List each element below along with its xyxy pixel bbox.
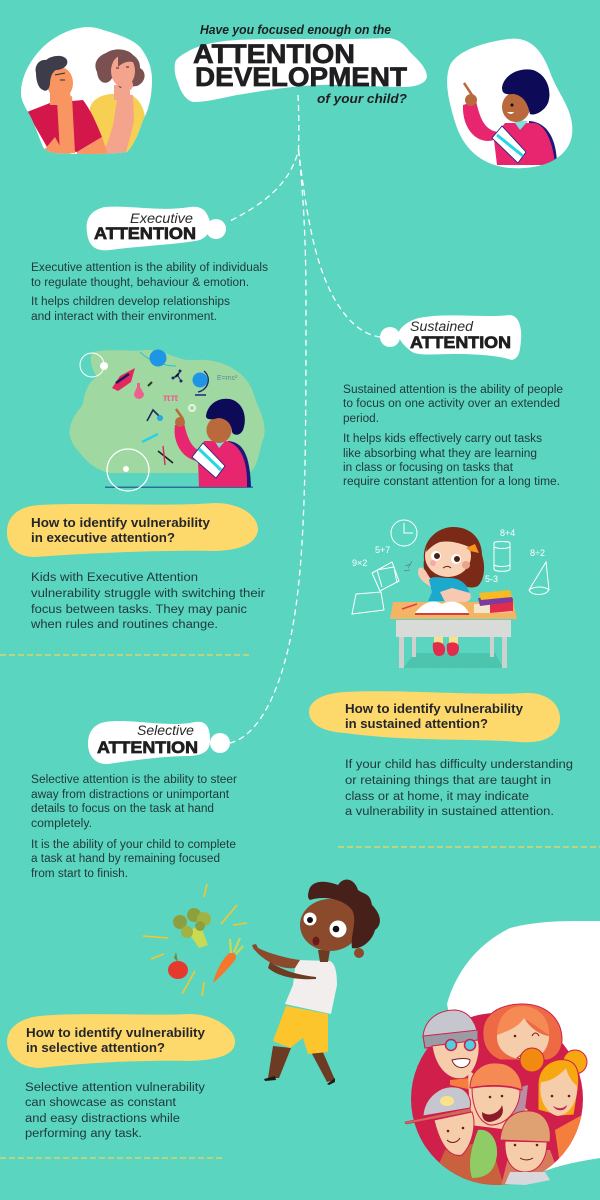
illustration: student and science icons <box>69 350 265 491</box>
title: ATTENTION <box>193 39 355 69</box>
callout: how to identify executive vulnerability: in executive attention? <box>31 530 175 545</box>
text: executive vulnerability: vulnerability struggle with switching their <box>31 588 265 600</box>
text: sustained vulnerability: or retaining things that are taught in <box>345 775 551 787</box>
illustration: boy pointing <box>447 39 572 168</box>
text: executive description: and interact with their environment. <box>31 311 217 323</box>
text: selective vulnerability: and easy distractions while <box>25 1113 180 1125</box>
callout: how to identify executive vulnerability: How to identify vulnerability <box>31 515 211 530</box>
heading: sustained attention <box>380 315 521 360</box>
text: executive vulnerability <box>30 572 265 631</box>
heading: selective attention: ATTENTION <box>97 739 198 757</box>
text: selective description: Selective attention is the ability to steer <box>31 774 237 786</box>
text: executive description: Executive attention is the ability of individuals <box>31 262 268 274</box>
title: of your child? <box>317 92 407 106</box>
text: sustained vulnerability: a vulnerability in sustained attention. <box>345 806 554 818</box>
text: sustained description: It helps kids effectively carry out tasks <box>343 433 542 445</box>
text: selective vulnerability <box>25 1082 205 1140</box>
title <box>175 23 427 106</box>
text: selective vulnerability: Selective attention vulnerability <box>25 1082 205 1094</box>
illustration: thinking parents <box>21 27 152 160</box>
callout: how to identify sustained vulnerability <box>309 691 560 742</box>
heading: executive attention: ATTENTION <box>94 225 196 243</box>
text: sustained description: to focus on one activity over an extended <box>343 398 560 410</box>
callout: how to identify sustained vulnerability: How to identify vulnerability <box>345 701 524 716</box>
text: sustained description: Sustained attention is the ability of people <box>343 384 563 396</box>
text: selective vulnerability: performing any task. <box>25 1128 142 1140</box>
text: executive description: It helps children develop relationships <box>31 296 230 308</box>
text: executive vulnerability: focus between tasks. They may panic <box>31 604 247 616</box>
callout: how to identify executive vulnerability <box>7 503 258 557</box>
text: sustained description <box>343 384 563 488</box>
text: selective description: details to focus on the task at hand <box>31 803 214 815</box>
text: executive vulnerability: when rules and routines change. <box>30 619 218 631</box>
illustration: girl at desk: 8+4 <box>500 528 515 538</box>
callout: how to identify sustained vulnerability: in sustained attention? <box>345 716 488 731</box>
illustration: group of children <box>405 1004 587 1190</box>
text: selective description <box>31 774 237 880</box>
text: executive vulnerability: Kids with Executive Attention <box>31 572 198 584</box>
text: sustained vulnerability: If your child has difficulty understanding <box>345 759 573 771</box>
illustration: girl at desk: 8÷2 <box>530 548 545 558</box>
illustration: girl at desk: 5+7 <box>375 545 390 555</box>
decorative white blob behind kids <box>447 921 600 1175</box>
callout: how to identify selective vulnerability: How to identify vulnerability <box>26 1025 206 1040</box>
heading: sustained attention: ATTENTION <box>410 334 511 352</box>
text: sustained vulnerability: class or at home, it may indicate <box>345 791 529 803</box>
text: executive description <box>31 262 268 323</box>
title: DEVELOPMENT <box>195 62 407 92</box>
text: selective vulnerability: can showcase as constant <box>25 1097 177 1109</box>
callout: how to identify selective vulnerability: in selective attention? <box>26 1040 165 1055</box>
text: selective description: It is the ability of your child to complete <box>31 839 236 851</box>
text: sustained description: in class or focusing on tasks that <box>343 462 514 474</box>
text: sustained description: period. <box>343 413 379 425</box>
heading: sustained attention: Sustained <box>410 319 474 334</box>
heading: selective attention <box>88 721 230 764</box>
text: selective description: away from distractions or unimportant <box>31 789 230 801</box>
text: executive description: to regulate thought, behaviour & emotion. <box>31 277 249 289</box>
illustration: girl at desk: 9×2 <box>352 558 367 568</box>
text: sustained description: like absorbing what they are learning <box>343 448 537 460</box>
dashed connector lines <box>228 95 380 743</box>
text: selective description: from start to finish. <box>31 868 128 880</box>
text: selective description: a task at hand by remaining focused <box>31 853 220 865</box>
text: selective description: completely. <box>31 818 92 830</box>
illustration: girl at desk <box>352 520 549 668</box>
illustration: girl at desk: 5-3 <box>485 574 498 584</box>
callout: how to identify selective vulnerability <box>7 1014 235 1068</box>
text: sustained vulnerability <box>345 759 573 818</box>
heading: executive attention <box>87 207 226 250</box>
heading: executive attention: Executive <box>130 211 193 226</box>
title: Have you focused enough on the <box>200 23 391 37</box>
illustration: student and science icons: E=mc² <box>217 375 238 382</box>
text: sustained description: require constant attention for a long time. <box>343 476 560 488</box>
illustration: student and science icons: ππ <box>163 393 179 404</box>
heading: selective attention: Selective <box>137 723 194 738</box>
illustration: boy avoiding vegetables <box>143 880 380 1085</box>
